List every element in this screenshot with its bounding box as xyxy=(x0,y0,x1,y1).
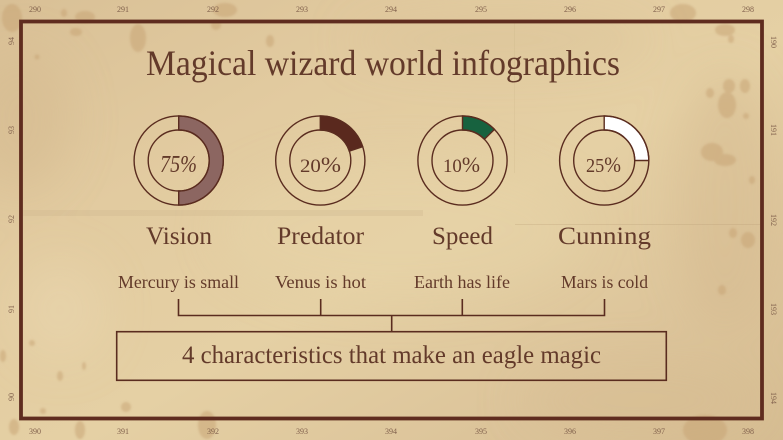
ruler numbers: right: 193 xyxy=(769,303,778,315)
text: Venus is hot: Venus is hot xyxy=(275,272,366,292)
donut: Vision 75%: 75% xyxy=(160,152,197,178)
ruler numbers: top: 293 xyxy=(296,5,308,14)
segment xyxy=(462,116,494,139)
ruler numbers: bottom: 394 xyxy=(385,427,397,436)
ruler numbers: top: 292 xyxy=(207,5,219,14)
ruler numbers: top: 295 xyxy=(475,5,487,14)
bracket connector xyxy=(178,299,604,332)
ruler numbers: top: 294 xyxy=(385,5,397,14)
ruler numbers: left xyxy=(7,37,16,401)
segment xyxy=(179,116,223,205)
ruler numbers: top xyxy=(29,5,754,14)
ruler numbers: bottom: 391 xyxy=(117,427,129,436)
summary box xyxy=(117,332,666,380)
text: Mars is cold: Mars is cold xyxy=(561,272,648,292)
ruler numbers: right xyxy=(769,36,778,404)
ruler numbers: left: 90 xyxy=(7,393,16,401)
ruler numbers: top: 297 xyxy=(653,5,665,14)
ruler numbers: top: 298 xyxy=(742,5,754,14)
text: Mercury is small: Mercury is small xyxy=(118,272,239,292)
heading: Predator: Predator xyxy=(277,223,365,250)
ruler numbers: bottom: 397 xyxy=(653,427,665,436)
donut: Speed 10%: 10% xyxy=(443,152,480,177)
ruler numbers: top: 291 xyxy=(117,5,129,14)
donut: Predator 20% xyxy=(276,116,365,205)
summary box: 4 characteristics that make an eagle magic xyxy=(182,342,601,369)
heading: Vision: Vision xyxy=(146,223,212,250)
segment xyxy=(320,116,363,151)
ruler numbers: right: 192 xyxy=(769,214,778,226)
ruler numbers: left: 94 xyxy=(7,37,16,45)
ruler numbers: right: 194 xyxy=(769,392,778,404)
ruler numbers: left: 92 xyxy=(7,215,16,223)
ruler numbers: bottom: 398 xyxy=(742,427,754,436)
heading: Speed: Speed xyxy=(432,223,493,250)
heading: Cunning: Cunning xyxy=(558,223,652,250)
ruler numbers: bottom: 396 xyxy=(564,427,576,436)
ruler numbers: right: 190 xyxy=(769,36,778,48)
ruler numbers: bottom xyxy=(29,427,754,436)
text: Earth has life: Earth has life xyxy=(414,272,510,292)
donut: Cunning 25%: 25% xyxy=(586,152,621,177)
ruler numbers: bottom: 392 xyxy=(207,427,219,436)
ruler numbers: bottom: 395 xyxy=(475,427,487,436)
donut: Cunning 25% xyxy=(560,116,649,205)
ruler numbers: bottom: 390 xyxy=(29,427,41,436)
ruler numbers: left: 91 xyxy=(7,305,16,313)
title: Magical wizard world infographics xyxy=(146,43,620,83)
ruler numbers: left: 93 xyxy=(7,126,16,134)
donut: Speed 10% xyxy=(418,116,507,205)
donut: Vision 75% xyxy=(134,116,223,205)
donut: Predator 20%: 20% xyxy=(300,152,341,177)
ruler numbers: bottom: 393 xyxy=(296,427,308,436)
ruler numbers: top: 290 xyxy=(29,5,41,14)
ruler numbers: top: 296 xyxy=(564,5,576,14)
segment xyxy=(604,116,649,160)
ruler numbers: right: 191 xyxy=(769,124,778,136)
